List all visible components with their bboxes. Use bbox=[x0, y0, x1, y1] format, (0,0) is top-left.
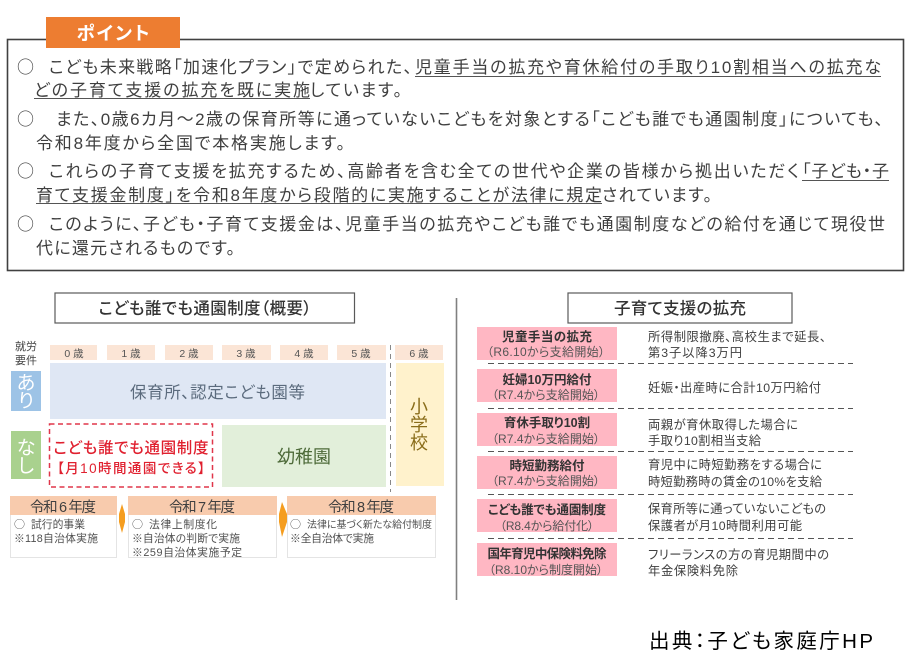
heading: こども誰でも通園制度（概要）: こども誰でも通園制度（概要） bbox=[98, 299, 312, 318]
row: こども誰でも通園制度: 保育所等に通っていないこどもの bbox=[648, 501, 826, 516]
text block: point 2: 令和8年度から全国で本格実施します。 bbox=[36, 134, 345, 153]
block: 保育所、認定こども園等 bbox=[50, 363, 386, 419]
label: なし bbox=[11, 431, 41, 479]
timeline card: 令和8年度: ○ bbox=[290, 516, 301, 532]
block: 小学校: 小 bbox=[410, 397, 428, 417]
text block: point 1: ○ bbox=[17, 53, 34, 78]
text block: point 4 bbox=[17, 210, 885, 258]
row: こども誰でも通園制度: こども誰でも通園制度 bbox=[488, 502, 606, 517]
row: 育休手取り10割 bbox=[477, 413, 798, 448]
age header row bbox=[50, 345, 443, 360]
row: 時短勤務給付: （R7.4から支給開始） bbox=[492, 474, 600, 488]
label: あり bbox=[11, 371, 41, 412]
timeline card: 令和6年度: 令和 6 年度 bbox=[30, 499, 96, 516]
timeline card: 令和6年度: ※118自治体実施 bbox=[14, 531, 98, 545]
heading tab: ポイント bbox=[46, 17, 180, 48]
row: 国年育児中保険料免除: フリーランスの方の育児期間中の bbox=[648, 547, 829, 562]
text block: point 3: 「子ども・子 bbox=[802, 162, 889, 181]
label: 就労要件: 就労 bbox=[15, 339, 37, 353]
text block: point 2: ○ bbox=[17, 105, 34, 130]
timeline card: 令和7年度: ○ bbox=[132, 516, 143, 532]
timeline card: 令和7年度: 令和 7 年度 bbox=[169, 499, 235, 516]
text block: point 1: どの子育て支援の拡充を既に実施 bbox=[34, 81, 310, 100]
block: 小学校: 校 bbox=[410, 433, 428, 453]
text block: point 3: されています。 bbox=[602, 186, 712, 205]
age header row: 3 歳 bbox=[236, 348, 256, 360]
age header row: 5 歳 bbox=[351, 348, 371, 360]
row: 国年育児中保険料免除 bbox=[477, 543, 829, 578]
row: こども誰でも通園制度 bbox=[477, 499, 826, 533]
heading: 子育て支援の拡充: 子育て支援の拡充 bbox=[614, 299, 746, 318]
timeline card: 令和6年度: 試行的事業 bbox=[31, 517, 85, 531]
row: 時短勤務給付 bbox=[477, 456, 823, 489]
label: なし: な bbox=[17, 438, 35, 459]
row: こども誰でも通園制度: （R8.4から給付化） bbox=[500, 519, 594, 533]
heading: こども誰でも通園制度（概要） bbox=[55, 293, 354, 323]
panel: expansion of childcare support bbox=[477, 293, 853, 578]
block: 小学校 bbox=[396, 363, 444, 486]
text block: point 2 bbox=[17, 105, 883, 153]
row: 時短勤務給付: 時短勤務給付 bbox=[509, 458, 585, 473]
block: 保育所、認定こども園等: 保育所、認定こども園等 bbox=[130, 383, 305, 402]
timeline card: 令和7年度: ※259自治体実施予定 bbox=[132, 545, 242, 559]
label: なし: し bbox=[18, 456, 34, 477]
text block: point 1: 児童手当の拡充や育休給付の手取り10割相当への拡充な bbox=[415, 58, 881, 77]
text block: point 3: ○ bbox=[17, 157, 34, 182]
timeline card: 令和7年度: 法律上制度化 bbox=[149, 518, 217, 531]
arrow bbox=[279, 502, 287, 537]
age header row: 4 歳 bbox=[294, 348, 314, 360]
block: こども誰でも通園制度 dashed callout: こども誰でも通園制度 bbox=[54, 439, 208, 457]
block: こども誰でも通園制度 dashed callout: 【月10時間通園できる】 bbox=[57, 461, 205, 476]
label: あり: り bbox=[18, 391, 34, 412]
timeline card: 令和7年度 bbox=[128, 496, 277, 559]
row: 国年育児中保険料免除: 年金保険料免除 bbox=[648, 563, 738, 578]
row: 妊婦10万円給付: 妊婦10万円給付 bbox=[503, 372, 592, 387]
text block: point 1: こども未来戦略「加速化プラン」で定められた、 bbox=[49, 58, 412, 77]
panel: key points box bbox=[8, 17, 904, 270]
age header row: 2 歳 bbox=[179, 348, 199, 360]
label: 就労要件: 要件 bbox=[15, 354, 37, 367]
age header row: 6 歳 bbox=[409, 348, 429, 360]
timeline card: 令和8年度: 法律に基づく新たな給付制度 bbox=[307, 518, 432, 531]
row: 育休手取り10割: 手取り10割相当支給 bbox=[648, 434, 762, 448]
source note: 出典：子ども家庭庁HP bbox=[649, 630, 873, 653]
block: こども誰でも通園制度 dashed callout bbox=[50, 424, 212, 487]
text block: point 3: これらの子育て支援を拡充するため、高齢者を含む全ての世代や企業の皆様から拠出いただく bbox=[49, 162, 799, 181]
arrow bbox=[119, 504, 125, 533]
row: 児童手当の拡充: （R6.10から支給開始） bbox=[487, 345, 605, 359]
row: 育休手取り10割: 両親が育休取得した場合に bbox=[648, 417, 798, 432]
row: 妊婦10万円給付 bbox=[477, 369, 821, 402]
block: 幼稚園: 幼稚園 bbox=[277, 447, 331, 467]
heading tab: ポイント: ポイント bbox=[76, 23, 150, 44]
timeline card: 令和8年度: 令和 8 年度 bbox=[328, 499, 394, 516]
text block: point 3: 育て支援金制度」を令和8年度から段階的に実施することが法律に規定 bbox=[36, 186, 602, 205]
row: 児童手当の拡充 bbox=[477, 327, 826, 360]
label: あり: あ bbox=[17, 373, 35, 394]
block: 小学校: 学 bbox=[410, 415, 428, 435]
age header row: 1 歳 bbox=[121, 348, 141, 360]
row: こども誰でも通園制度: 保護者が月10時間利用可能 bbox=[648, 518, 802, 533]
row: 国年育児中保険料免除: 国年育児中保険料免除 bbox=[488, 546, 607, 561]
row: 児童手当の拡充: 児童手当の拡充 bbox=[502, 329, 592, 344]
row: 児童手当の拡充: 第3子以降3万円 bbox=[648, 346, 742, 360]
timeline card: 令和6年度 bbox=[10, 496, 117, 558]
text block: point 1 bbox=[17, 53, 881, 100]
block: 幼稚園 bbox=[222, 425, 386, 487]
timeline card: 令和7年度: ※自治体の判断で実施 bbox=[132, 531, 240, 545]
row: 児童手当の拡充: 所得制限撤廃、高校生まで延長、 bbox=[648, 329, 826, 344]
panel: childcare system overview bbox=[10, 293, 444, 559]
text block: point 1: しています。 bbox=[310, 81, 402, 100]
text block: point 4: このように、子ども・子育て支援金は、児童手当の拡充やこども誰でも通園制度などの給付を通じて現役世 bbox=[49, 215, 885, 234]
heading: 子育て支援の拡充 bbox=[568, 293, 792, 323]
age header row: 0 歳 bbox=[64, 348, 84, 360]
timeline card: 令和8年度: ※全自治体で実施 bbox=[290, 531, 374, 545]
row: 妊婦10万円給付: 妊娠・出産時に合計10万円給付 bbox=[648, 380, 821, 395]
text block: point 2: また、0歳6カ月～2歳の保育所等に通っていないこどもを対象とする「こども誰でも通園制度」についても、 bbox=[56, 110, 883, 129]
row: 妊婦10万円給付: （R7.4から支給開始） bbox=[492, 388, 600, 402]
timeline card: 令和6年度: ○ bbox=[14, 516, 25, 532]
row: 時短勤務給付: 時短勤務時の賃金の10%を支給 bbox=[648, 474, 823, 489]
timeline card: 令和8年度 bbox=[287, 496, 436, 558]
text block: point 4: 代に還元されるものです。 bbox=[36, 239, 235, 258]
row: 時短勤務給付: 育児中に時短勤務をする場合に bbox=[648, 457, 822, 472]
row: 育休手取り10割: 育休手取り10割 bbox=[504, 415, 590, 430]
row: 育休手取り10割: （R7.4から支給開始） bbox=[492, 432, 600, 446]
text block: point 4: ○ bbox=[17, 210, 34, 235]
text block: point 3 bbox=[17, 157, 889, 205]
row: 国年育児中保険料免除: （R8.10から制度開始） bbox=[489, 563, 603, 577]
